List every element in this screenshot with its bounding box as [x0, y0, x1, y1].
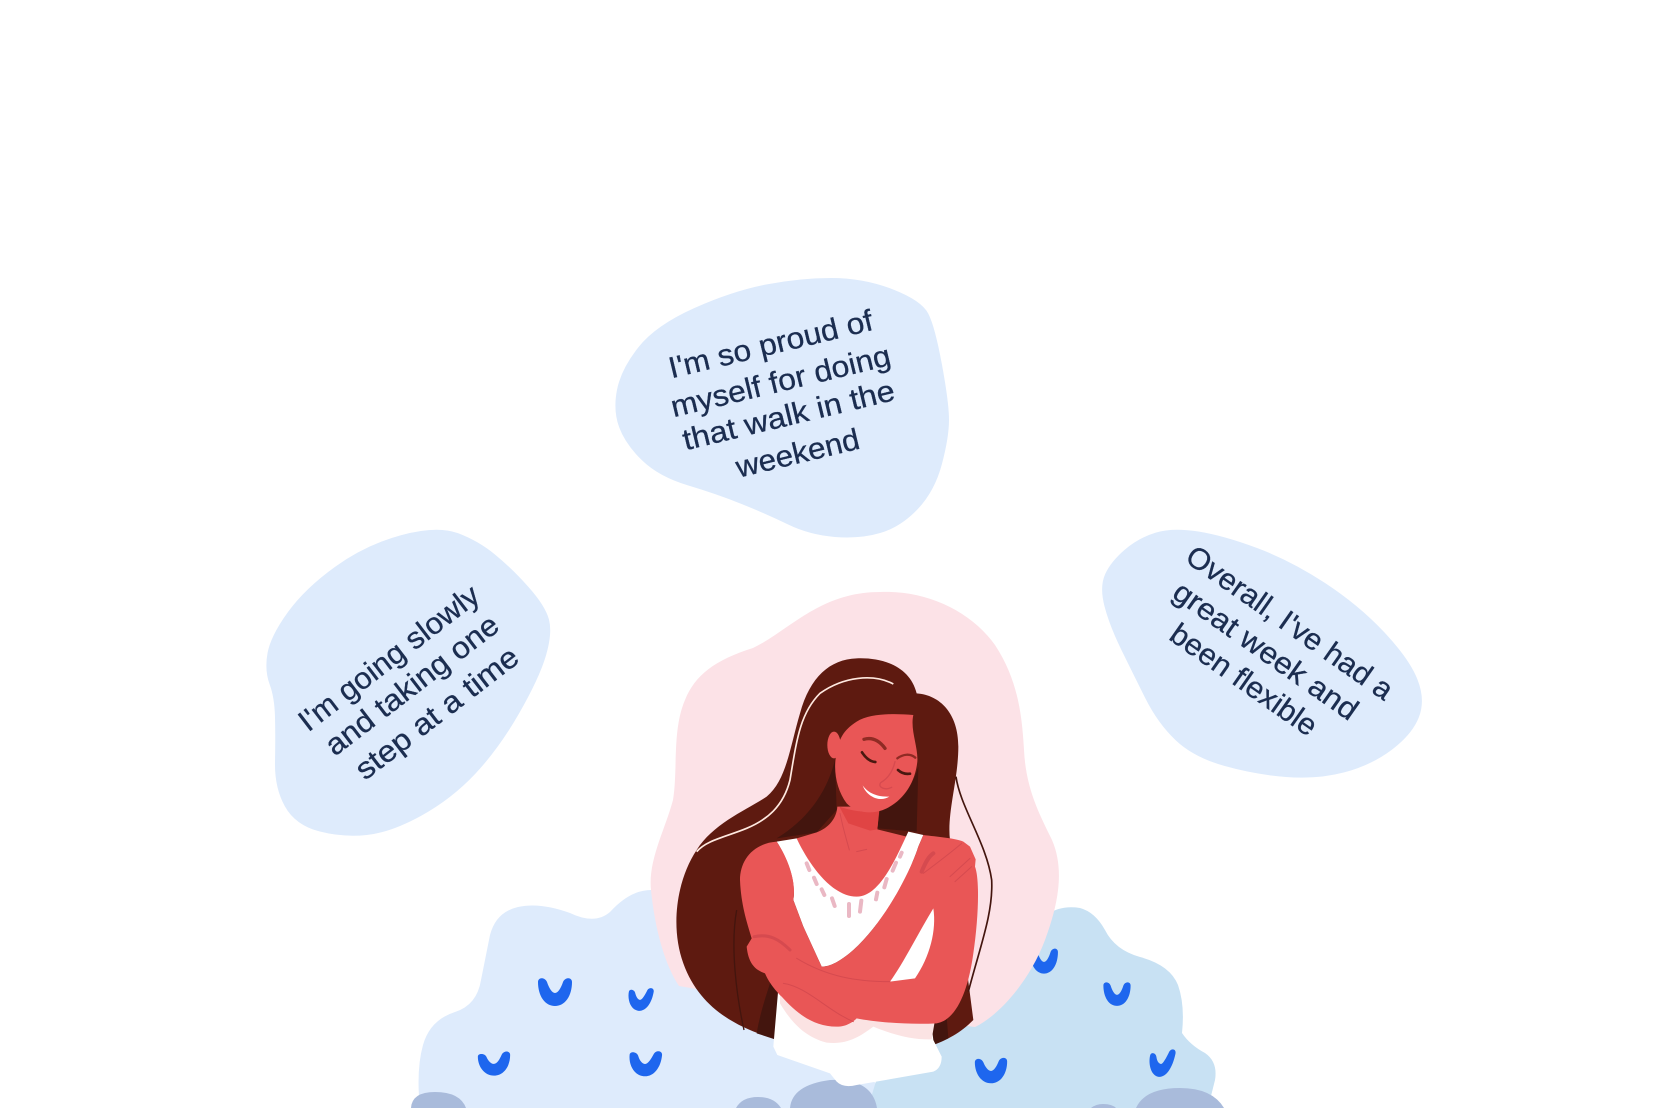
pink blob behind the woman: [651, 592, 1059, 1027]
bush: right: [868, 907, 1216, 1108]
speech bubble: proud of myself: I'm so proud of: [665, 304, 877, 385]
speech bubble: proud of myself: [617, 280, 947, 536]
facial features: [862, 739, 915, 789]
speech bubble: great week: [1105, 532, 1419, 775]
hair shadows: [757, 760, 948, 1045]
pale shadow under the arms: [780, 990, 935, 1043]
smile: [863, 785, 889, 799]
speech bubble: great week: been flexible: [1164, 617, 1323, 743]
upper tank top: [777, 832, 923, 967]
tank top side strip: [890, 908, 934, 982]
hair strands: [697, 678, 992, 1030]
speech bubble: going slowly: I'm going slowly: [292, 579, 486, 738]
woman hugging herself: [676, 658, 992, 1086]
speech bubble: great week: great week and: [1167, 575, 1364, 727]
arm and hand contours: [754, 813, 972, 1022]
neckline pattern: [807, 853, 902, 916]
speech bubble: going slowly: [269, 532, 548, 833]
bush: left: [419, 890, 890, 1108]
speech bubble: going slowly: step at a time: [349, 640, 525, 787]
rocks along the bottom: [411, 1080, 1224, 1108]
ear: [827, 732, 841, 758]
neck shadow: [839, 807, 879, 831]
speech bubble: proud of myself: myself for doing: [668, 339, 894, 424]
hair: [676, 658, 973, 1045]
speech bubble: proud of myself: weekend: [732, 423, 863, 485]
speech bubble: proud of myself: that walk in the: [679, 374, 898, 457]
speech bubble: great week: Overall, I've had a: [1180, 539, 1400, 707]
speech bubble: going slowly: and taking one: [319, 608, 506, 762]
arms: [740, 835, 978, 1027]
blue check marks on the bushes: [478, 949, 1176, 1083]
lower tank top: [773, 988, 942, 1086]
face: [835, 714, 917, 812]
neck and chest: [780, 807, 917, 933]
